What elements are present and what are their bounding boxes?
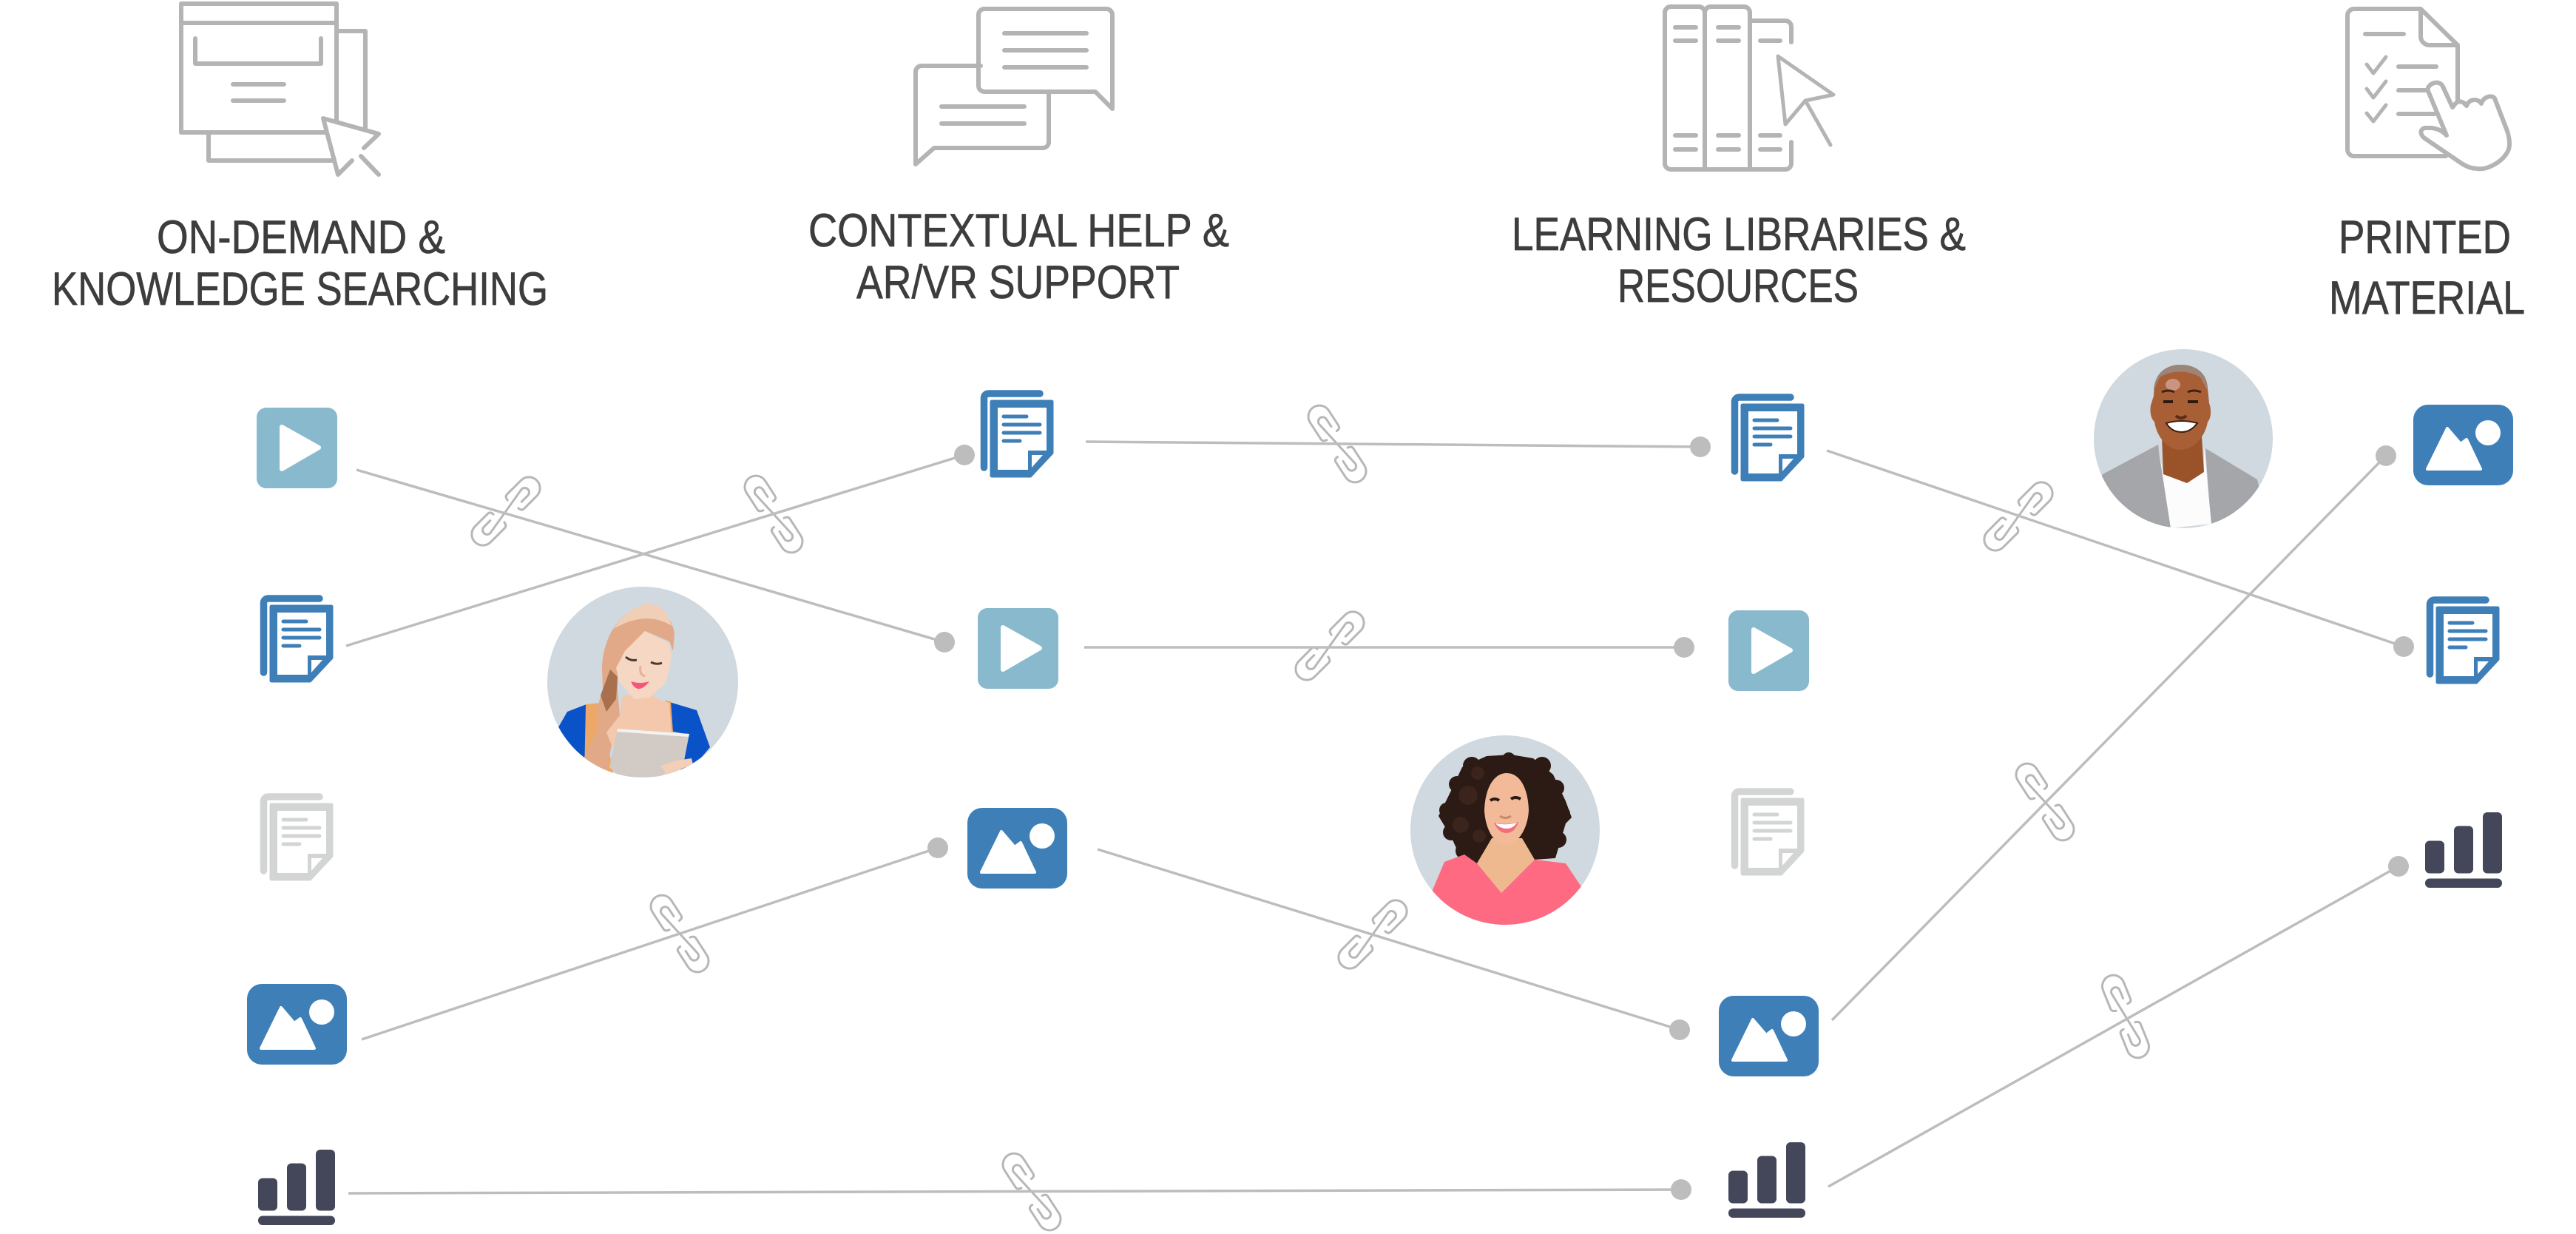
icon: printed checklist with hand — [2347, 9, 2509, 169]
connector: video to video, column 2 to 3 — [1084, 637, 1694, 658]
paperclip link 8 — [2012, 759, 2078, 845]
icon: chat bubbles — [916, 9, 1112, 164]
heading: printed material: MATERIAL — [2329, 272, 2525, 324]
icon: video, column 1 — [257, 408, 337, 488]
icon: video, column 2 — [978, 608, 1058, 689]
paperclip link 5 — [646, 891, 713, 977]
icon: image, column 3 — [1719, 996, 1819, 1076]
heading: on-demand and knowledge searching: KNOWLEDGE SEARCHING — [52, 263, 548, 315]
icon: faded document, column 3 — [1735, 792, 1802, 874]
icon: document, column 1 — [263, 599, 331, 681]
paperclip link 7 — [1980, 478, 2057, 555]
connector: image to image, column 2 to 3 — [1098, 849, 1690, 1040]
connector: document to document, column 3 to 4 — [1827, 451, 2414, 657]
paperclip link 4 — [1291, 607, 1368, 684]
icon: faded document, column 1 — [263, 797, 331, 879]
heading: learning libraries and resources: LEARNING LIBRARIES & — [1512, 209, 1966, 260]
icon: bar chart, column 4 — [2425, 812, 2502, 888]
heading: learning libraries and resources: RESOURCES — [1617, 260, 1859, 312]
paperclip link 9 — [998, 1149, 1065, 1234]
connector: image to image, column 3 to 4 — [1832, 445, 2396, 1020]
heading: printed material: PRINTED — [2339, 212, 2511, 263]
icon: image, column 2 — [967, 808, 1067, 889]
heading: on-demand and knowledge searching: ON-DEMAND & — [157, 212, 445, 263]
paperclip link 6 — [1334, 896, 1411, 973]
icon: bar chart, column 3 — [1728, 1142, 1805, 1218]
connector: document to document, column 1 to 2 — [346, 445, 975, 646]
icon: image, column 4 — [2413, 405, 2513, 485]
portrait: woman with tablet — [547, 587, 738, 778]
heading: contextual help and AR/VR support: AR/VR SUPPORT — [856, 257, 1180, 308]
heading: contextual help and AR/VR support — [808, 205, 1229, 308]
icon: bar chart, column 1 — [258, 1150, 335, 1225]
icon: document, column 4 — [2430, 600, 2498, 682]
icon: image, column 1 — [247, 984, 347, 1065]
connector: video to video, column 1 to 2 — [356, 470, 955, 653]
icon: on-demand window with cursor — [181, 4, 379, 175]
heading: on-demand and knowledge searching — [52, 212, 548, 315]
portrait: woman with curly hair — [1405, 735, 1605, 932]
connector: bars to bars, column 3 to 4 — [1828, 856, 2409, 1187]
heading: learning libraries and resources — [1512, 209, 1966, 312]
paperclip link 2 — [740, 471, 807, 557]
paperclip link 3 — [1304, 401, 1370, 487]
connector: bars to bars, column 1 to 3 — [348, 1179, 1691, 1200]
icon: video, column 3 — [1728, 610, 1809, 691]
portrait: man in grey blazer — [2093, 349, 2273, 533]
heading: printed material — [2329, 212, 2525, 324]
paperclip link 10 — [2099, 972, 2152, 1061]
heading: contextual help and AR/VR support: CONTEXTUAL HELP & — [808, 205, 1229, 257]
paperclip link 1 — [467, 473, 544, 550]
icon: document, column 3 — [1735, 397, 1802, 479]
icon: books with cursor — [1665, 7, 1833, 169]
icon: document, column 2 — [984, 394, 1052, 476]
connector: image to image, column 1 to 2 — [362, 837, 948, 1039]
connector: document to document, column 2 to 3 — [1086, 436, 1711, 457]
